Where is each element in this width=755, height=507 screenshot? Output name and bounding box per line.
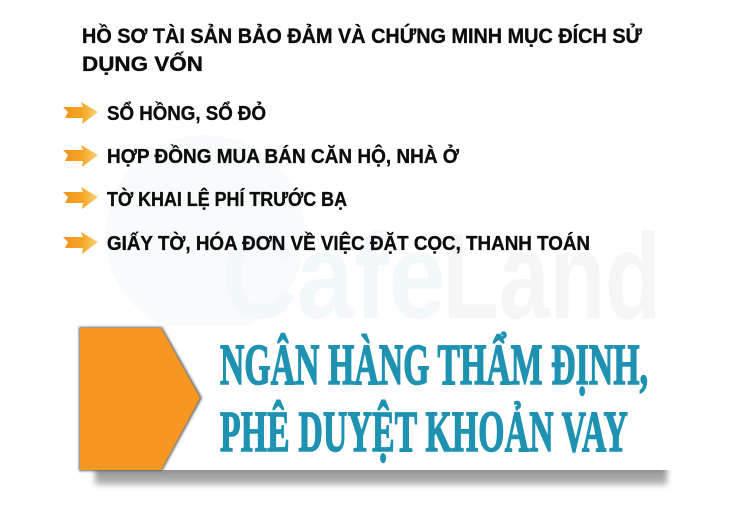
banner body: [90, 326, 680, 470]
list item: sổ hồng, sổ đỏ: [63, 101, 266, 125]
title: HỒ SƠ TÀI SẢN BẢO ĐẢM VÀ CHỨNG MINH MỤC ĐÍCH SỬ: [82, 24, 643, 48]
title: [82, 24, 643, 76]
list item: tờ khai lệ phí: [63, 187, 347, 211]
banner heading: PHÊ DUYỆT KHOẢN VAY: [220, 401, 628, 464]
label: TỜ KHAI LỆ PHÍ TRƯỚC BẠ: [107, 187, 347, 211]
label: SỔ HỒNG, SỔ ĐỎ: [107, 101, 266, 125]
icon: arrow: [63, 187, 98, 209]
label: HỢP ĐỒNG MUA BÁN CĂN HỘ, NHÀ Ở: [107, 144, 460, 168]
banner heading: NGÂN HÀNG THẨM ĐỊNH,: [220, 333, 648, 397]
banner: [79, 326, 680, 471]
icon: arrow: [63, 145, 98, 167]
title: DỤNG VỐN: [82, 52, 203, 76]
list item: giấy tờ, hóa đơn: [63, 231, 590, 255]
icon: orange pentagon: [80, 328, 200, 470]
watermark: CafeLand logo: Land: [443, 208, 661, 344]
list item: hợp đồng mua bán: [63, 144, 460, 168]
icon: arrow: [63, 232, 98, 254]
banner shadow: [95, 462, 667, 485]
label: GIẤY TỜ, HÓA ĐƠN VỀ VIỆC ĐẶT CỌC, THANH TOÁN: [107, 231, 590, 255]
watermark: CafeLand logo: Cafe: [222, 208, 446, 344]
icon: orange pentagon shadow: [79, 327, 202, 471]
banner heading: [220, 333, 648, 464]
icon: arrow: [63, 102, 98, 124]
watermark: CafeLand logo: [105, 135, 661, 344]
